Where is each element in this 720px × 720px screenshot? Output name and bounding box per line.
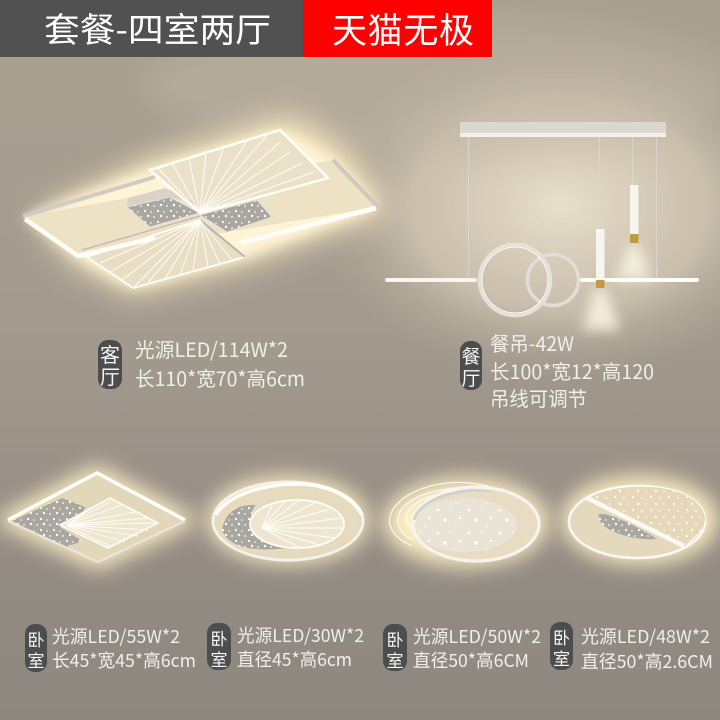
pendant ceiling bar: [460, 122, 666, 137]
tag: bedroom 1: 室: [28, 647, 44, 672]
tag: dining room: [460, 341, 482, 391]
spec text: bedroom 3: [413, 623, 541, 673]
tag: living room: 厅: [100, 361, 120, 390]
spec text: dining room: 餐吊-42W: [490, 328, 574, 357]
tag: bedroom 2: 卧: [210, 625, 228, 650]
header: store label: 天猫无极: [332, 3, 474, 54]
tag: bedroom 2: 室: [210, 646, 228, 671]
spec text: dining room: 吊线可调节: [490, 383, 587, 412]
spec text: bedroom 4: 光源LED/48W*2: [581, 623, 710, 649]
spec text: bedroom 1: [52, 623, 196, 673]
pendant wires: [468, 137, 656, 278]
spec text: bedroom 4: 直径50*高2.6CM: [581, 648, 713, 674]
lamp: bedroom half-moon light: [562, 476, 718, 564]
header banner: [0, 0, 492, 57]
spec text: dining room: 长100*宽12*高120: [490, 356, 654, 385]
pendant light beams: [582, 244, 652, 330]
tag: bedroom 4: [550, 622, 573, 670]
tag: bedroom 1: 卧: [28, 626, 44, 651]
tag: bedroom 1: [25, 624, 47, 672]
pendant rings: [480, 244, 578, 316]
header: package label: 套餐-四室两厅: [44, 3, 271, 52]
header: package label: [0, 0, 303, 57]
spec text: bedroom 3: 光源LED/50W*2: [413, 623, 541, 649]
tag: dining room: 餐: [461, 342, 481, 369]
spec text: living room: 光源LED/114W*2: [135, 334, 288, 363]
spec text: bedroom 2: 光源LED/30W*2: [237, 622, 364, 648]
pendant cylinders: [596, 185, 638, 288]
label: bedroom 3: [383, 623, 541, 673]
lamp: bedroom starry disc light: [384, 478, 548, 566]
tag: bedroom 3: 室: [386, 647, 404, 672]
spec text: dining room: [490, 328, 654, 412]
label: bedroom 1: [25, 623, 196, 673]
spec text: living room: [135, 334, 305, 392]
tag: bedroom 3: [383, 624, 407, 672]
lamp: bedroom square light: [8, 473, 185, 562]
tag: dining room: 厅: [461, 364, 481, 391]
spec text: bedroom 2: [237, 622, 364, 672]
lamp: dining pendant: [385, 122, 699, 330]
header: store label: [303, 0, 492, 57]
spec text: bedroom 2: 直径45*高6cm: [237, 646, 352, 672]
pendant horizontal bars: [385, 278, 699, 282]
spec text: bedroom 3: 直径50*高6CM: [413, 647, 529, 673]
lamp: living room ceiling light: [23, 118, 385, 292]
tag: bedroom 4: 室: [553, 645, 570, 670]
tag: living room: 客: [100, 339, 120, 368]
spec text: bedroom 1: 光源LED/55W*2: [52, 623, 180, 649]
label: living room: [98, 334, 305, 392]
lamp: bedroom round fan light: [208, 477, 368, 563]
tag: bedroom 3: 卧: [386, 626, 404, 651]
spec text: bedroom 1: 长45*宽45*高6cm: [52, 647, 196, 673]
spec text: bedroom 4: [581, 623, 713, 674]
tag: bedroom 4: 卧: [553, 624, 570, 649]
tag: bedroom 2: [207, 623, 231, 671]
label: bedroom 4: [550, 622, 713, 674]
tag: living room: [98, 339, 122, 390]
spec text: living room: 长110*宽70*高6cm: [135, 363, 305, 392]
label: bedroom 2: [207, 622, 364, 672]
label: dining room: [460, 328, 654, 412]
